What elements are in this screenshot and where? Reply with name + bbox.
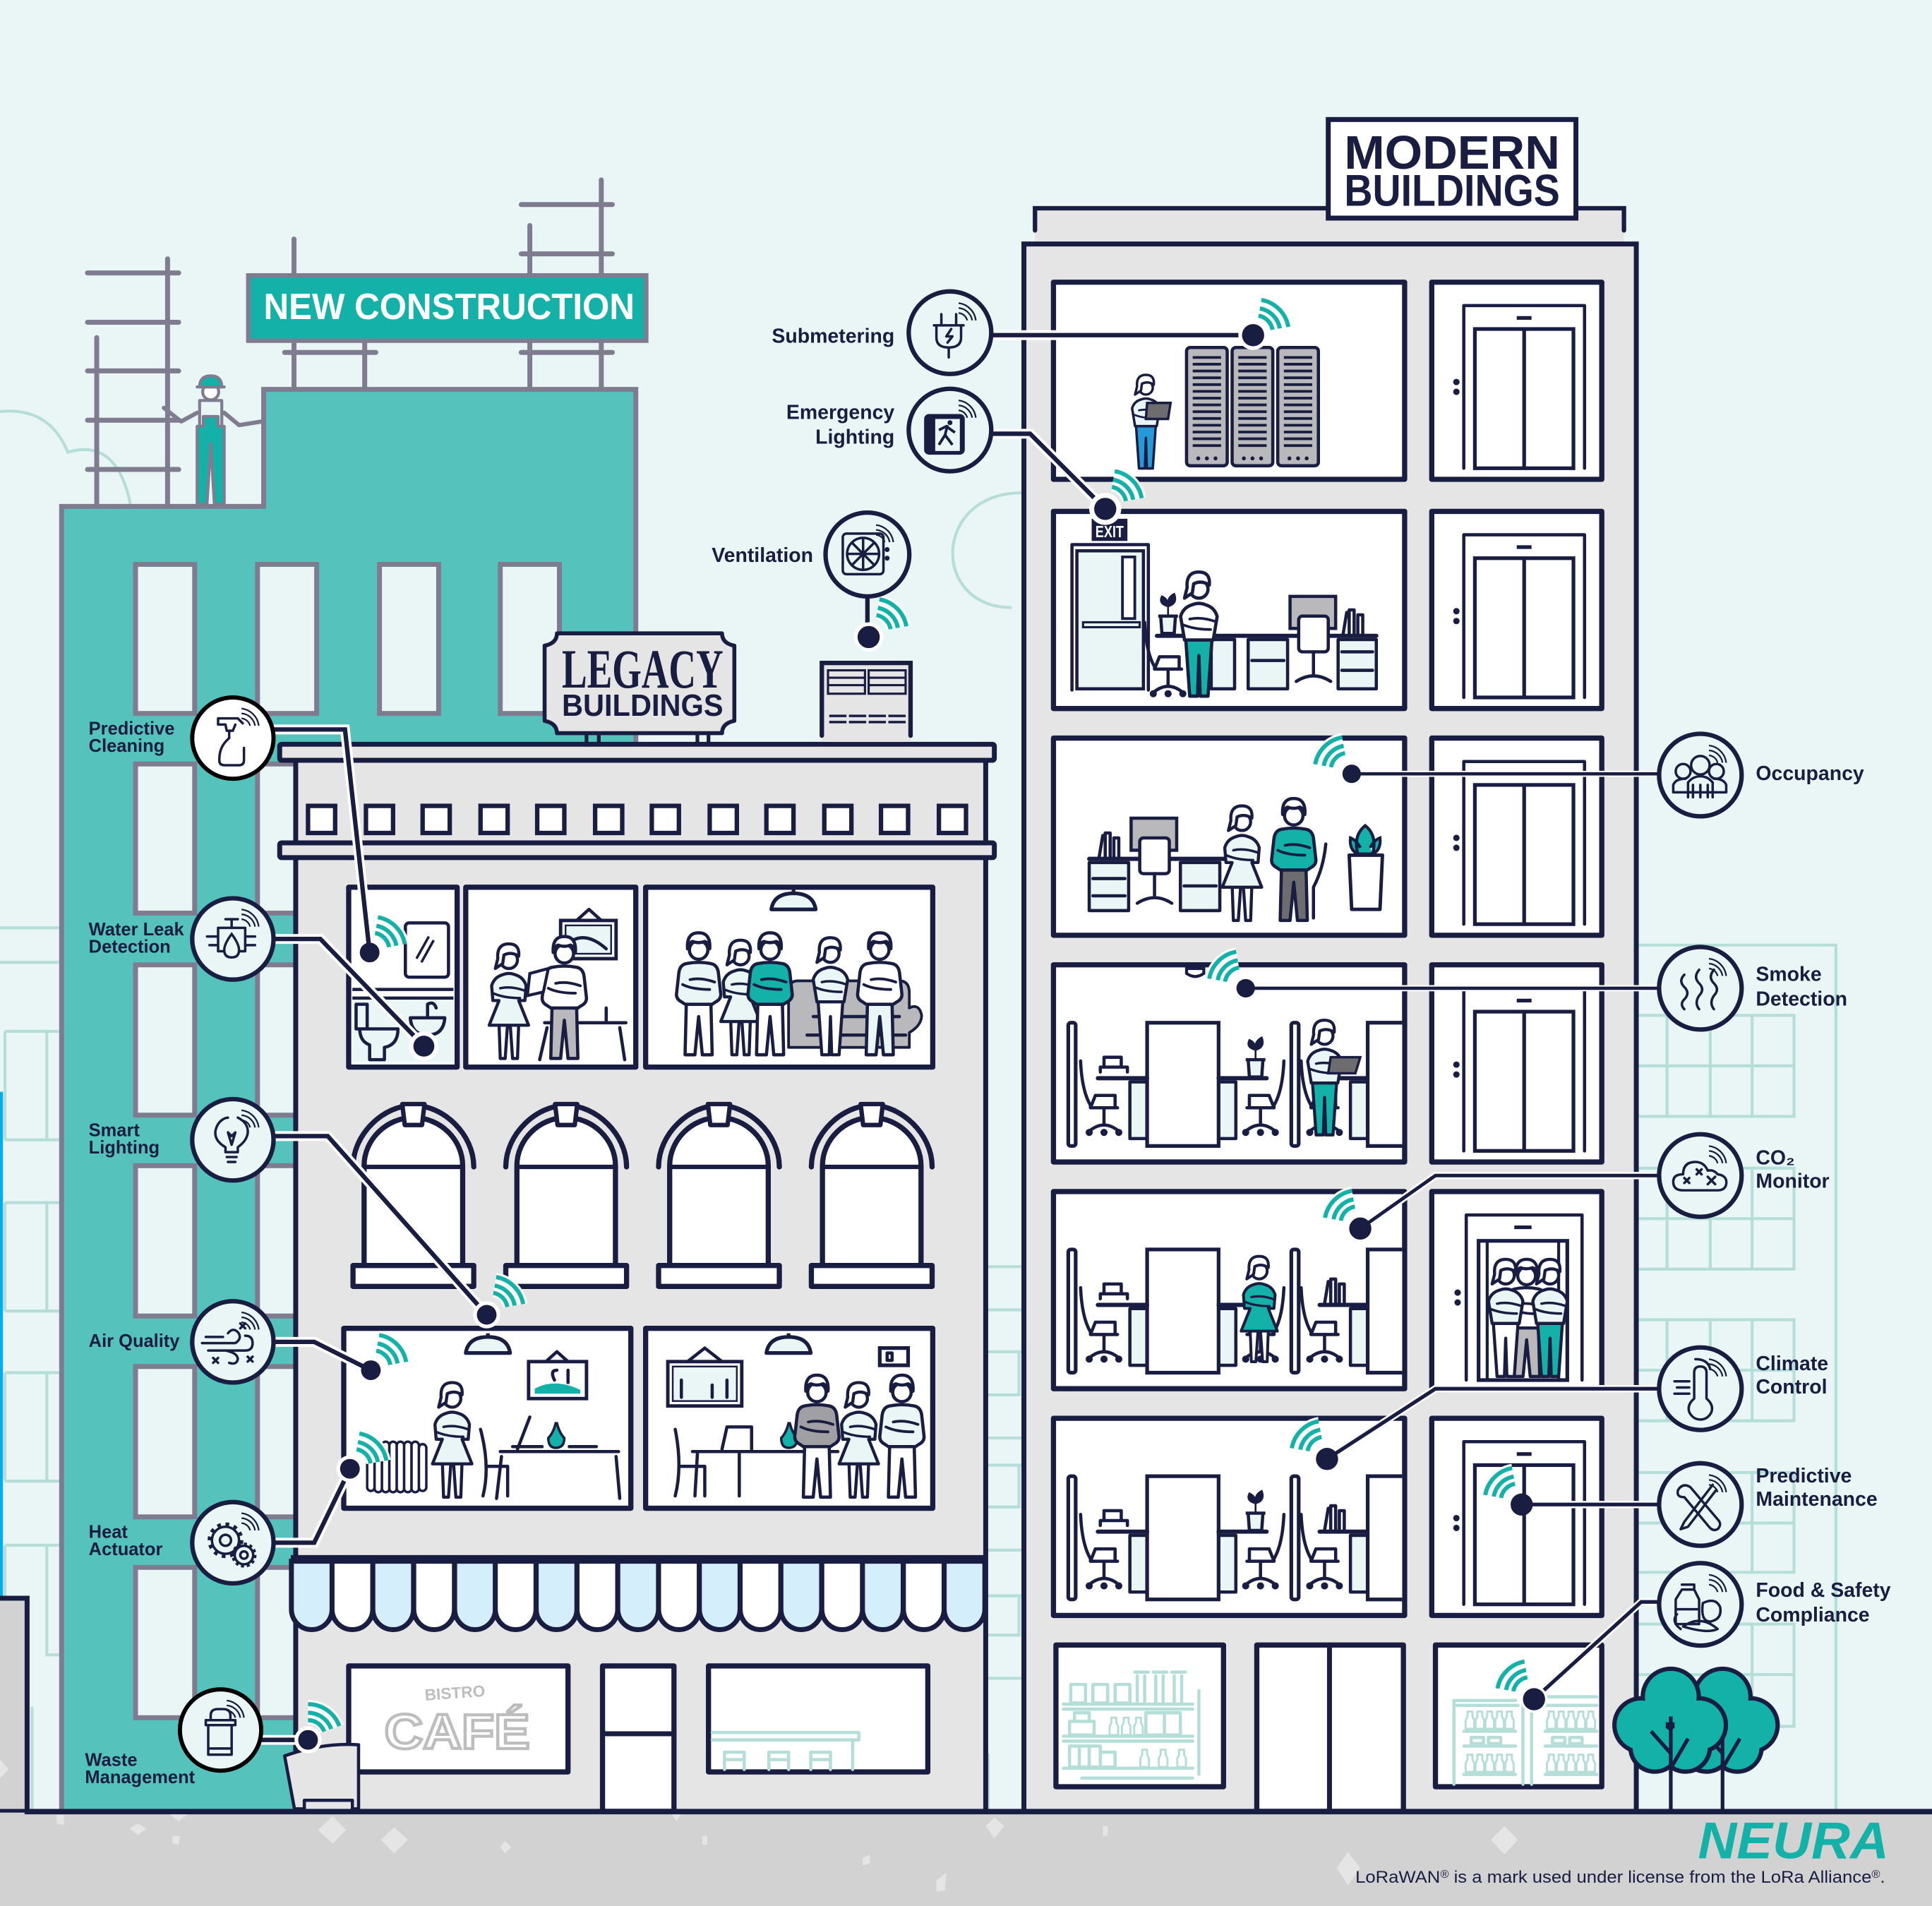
- label: heat actuator: Actuator: [89, 1540, 162, 1559]
- sensor link: predictive maintenance: [1485, 1468, 1657, 1516]
- arched windows: [353, 1104, 932, 1286]
- label: waste management: Management: [85, 1768, 196, 1787]
- icon: climate control: [1659, 1348, 1741, 1430]
- icon: submetering: [908, 292, 991, 374]
- legacy room: radiator and table: [344, 1329, 631, 1509]
- legacy door: [603, 1666, 674, 1811]
- label: air quality: Air Quality: [89, 1331, 180, 1351]
- icon: CO2 monitor: [1659, 1134, 1741, 1217]
- label: smart lighting: Smart: [89, 1120, 140, 1140]
- sensor link: ventilation: [854, 598, 906, 652]
- bistro cafe window: BISTRO: [424, 1682, 486, 1704]
- floor 4: cubicles: [1053, 965, 1405, 1162]
- icon: waste management: [180, 1689, 261, 1770]
- legacy window with counter: [709, 1666, 928, 1772]
- trademark note: ®: [1871, 1869, 1880, 1881]
- label: smoke detection: Smoke: [1756, 963, 1822, 985]
- legacy buildings sign: BUILDINGS: [562, 689, 724, 723]
- sensor link: heat actuator: [274, 1434, 386, 1542]
- legacy building: [280, 744, 995, 1811]
- sensor link: climate control: [1292, 1389, 1657, 1470]
- elevator with passengers: [1432, 1192, 1602, 1389]
- icon: food and safety: [1659, 1563, 1741, 1646]
- label: food and safety compliance: Compliance: [1756, 1604, 1870, 1626]
- modern buildings sign: MODERN: [1344, 127, 1560, 179]
- label: water leak detection: Water Leak: [89, 920, 184, 940]
- trademark note: is a mark used under license from the LoRa Alliance: [1448, 1868, 1871, 1887]
- icon: heat actuator: [192, 1502, 274, 1583]
- legacy room: meeting group: [646, 1329, 932, 1509]
- sensor link: food and safety: [1498, 1602, 1657, 1713]
- label: predictive cleaning: Cleaning: [89, 736, 164, 756]
- bistro cafe window: CAFÉ: [385, 1704, 530, 1759]
- ground floor entrance doors: [1256, 1645, 1403, 1811]
- label: smoke detection: Detection: [1756, 988, 1847, 1010]
- icon: smart lighting: [192, 1099, 274, 1180]
- legacy room: restroom: [349, 887, 457, 1067]
- label: water leak detection: Detection: [89, 937, 171, 957]
- legacy room: group and sofa: [646, 887, 932, 1067]
- sensor link: predictive cleaning: [274, 729, 405, 962]
- sensor link: water leak: [274, 939, 438, 1061]
- scaffold: [88, 180, 613, 505]
- label: emergency lighting: Emergency: [786, 401, 894, 424]
- label: emergency lighting: Lighting: [815, 426, 894, 448]
- trees: [1616, 1671, 1775, 1811]
- sensor link: air quality: [274, 1335, 406, 1380]
- sensor link: CO2 monitor: [1325, 1175, 1657, 1240]
- label: ventilation: Ventilation: [712, 544, 813, 567]
- sensor link: smart lighting: [274, 1136, 523, 1329]
- logo: NEURA: NEURA: [1698, 1811, 1889, 1869]
- modern building: [1024, 207, 1636, 1811]
- label: climate control: Control: [1756, 1376, 1827, 1398]
- legacy buildings sign: [545, 633, 734, 744]
- new construction building: [61, 390, 636, 1814]
- new construction sign: NEW CONSTRUCTION: [264, 287, 635, 328]
- worker: [164, 376, 263, 504]
- ground floor shop right: [1436, 1645, 1602, 1787]
- label: climate control: Climate: [1756, 1353, 1828, 1375]
- floor 5: cubicles: [1053, 1192, 1405, 1389]
- icon: water leak detection: [192, 898, 274, 980]
- trademark note: ®: [1440, 1869, 1449, 1881]
- icon: predictive maintenance: [1659, 1463, 1741, 1546]
- label: predictive maintenance: Predictive: [1756, 1465, 1852, 1487]
- sensor link: emergency lighting: [992, 433, 1141, 525]
- icon: air quality: [192, 1301, 274, 1382]
- modern buildings sign: [1328, 119, 1576, 218]
- icon: smoke detection: [1659, 947, 1741, 1029]
- floor 3: office team: [1053, 738, 1405, 935]
- label: heat actuator: Heat: [89, 1522, 128, 1542]
- rooftop air handling unit: [822, 661, 911, 742]
- trademark note: LoRaWAN: [1355, 1868, 1436, 1887]
- sensor link: occupancy: [1315, 738, 1657, 783]
- modern buildings sign: BUILDINGS: [1344, 167, 1560, 216]
- label: CO2 monitor: Monitor: [1756, 1170, 1830, 1193]
- left neighbouring building: [0, 1598, 27, 1811]
- label: predictive cleaning: Predictive: [89, 719, 174, 738]
- ground floor shop left: [1056, 1645, 1223, 1787]
- label: food and safety compliance: Food & Safety: [1756, 1579, 1891, 1602]
- icon: ventilation: [826, 513, 909, 597]
- awning: [291, 1555, 985, 1629]
- floor 2: exit door and office: EXIT: [1096, 522, 1124, 541]
- icon: occupancy: [1659, 733, 1741, 816]
- label: predictive maintenance: Maintenance: [1756, 1488, 1878, 1511]
- floor 2: exit door and office: [1053, 511, 1405, 709]
- blue edge line: [0, 1092, 3, 1597]
- label: occupancy: Occupancy: [1756, 762, 1864, 785]
- sensor link: submetering: [992, 300, 1288, 350]
- legacy room: discussion: [466, 887, 636, 1067]
- floor 6: cubicles: [1053, 1418, 1405, 1615]
- label: waste management: Waste: [85, 1750, 138, 1770]
- trademark note: .: [1880, 1868, 1885, 1887]
- legacy buildings sign: LEGACY: [562, 638, 724, 700]
- sensor link: waste management: [261, 1699, 340, 1754]
- bistro cafe window: [349, 1666, 568, 1772]
- floor 1: server room: [1053, 282, 1405, 479]
- label: smart lighting: Lighting: [89, 1138, 160, 1158]
- label: submetering: Submetering: [772, 325, 894, 347]
- new construction sign: [248, 275, 647, 341]
- background skyline outlines: [0, 411, 1836, 1811]
- icon: emergency lighting: [908, 389, 991, 472]
- sensor link: smoke detection: [1209, 952, 1657, 997]
- ground: [0, 1760, 1932, 1906]
- icon: predictive cleaning: [192, 697, 274, 779]
- label: CO2 monitor: CO₂: [1756, 1147, 1795, 1170]
- elevators: [1432, 282, 1602, 1615]
- trash bin: [284, 1744, 359, 1809]
